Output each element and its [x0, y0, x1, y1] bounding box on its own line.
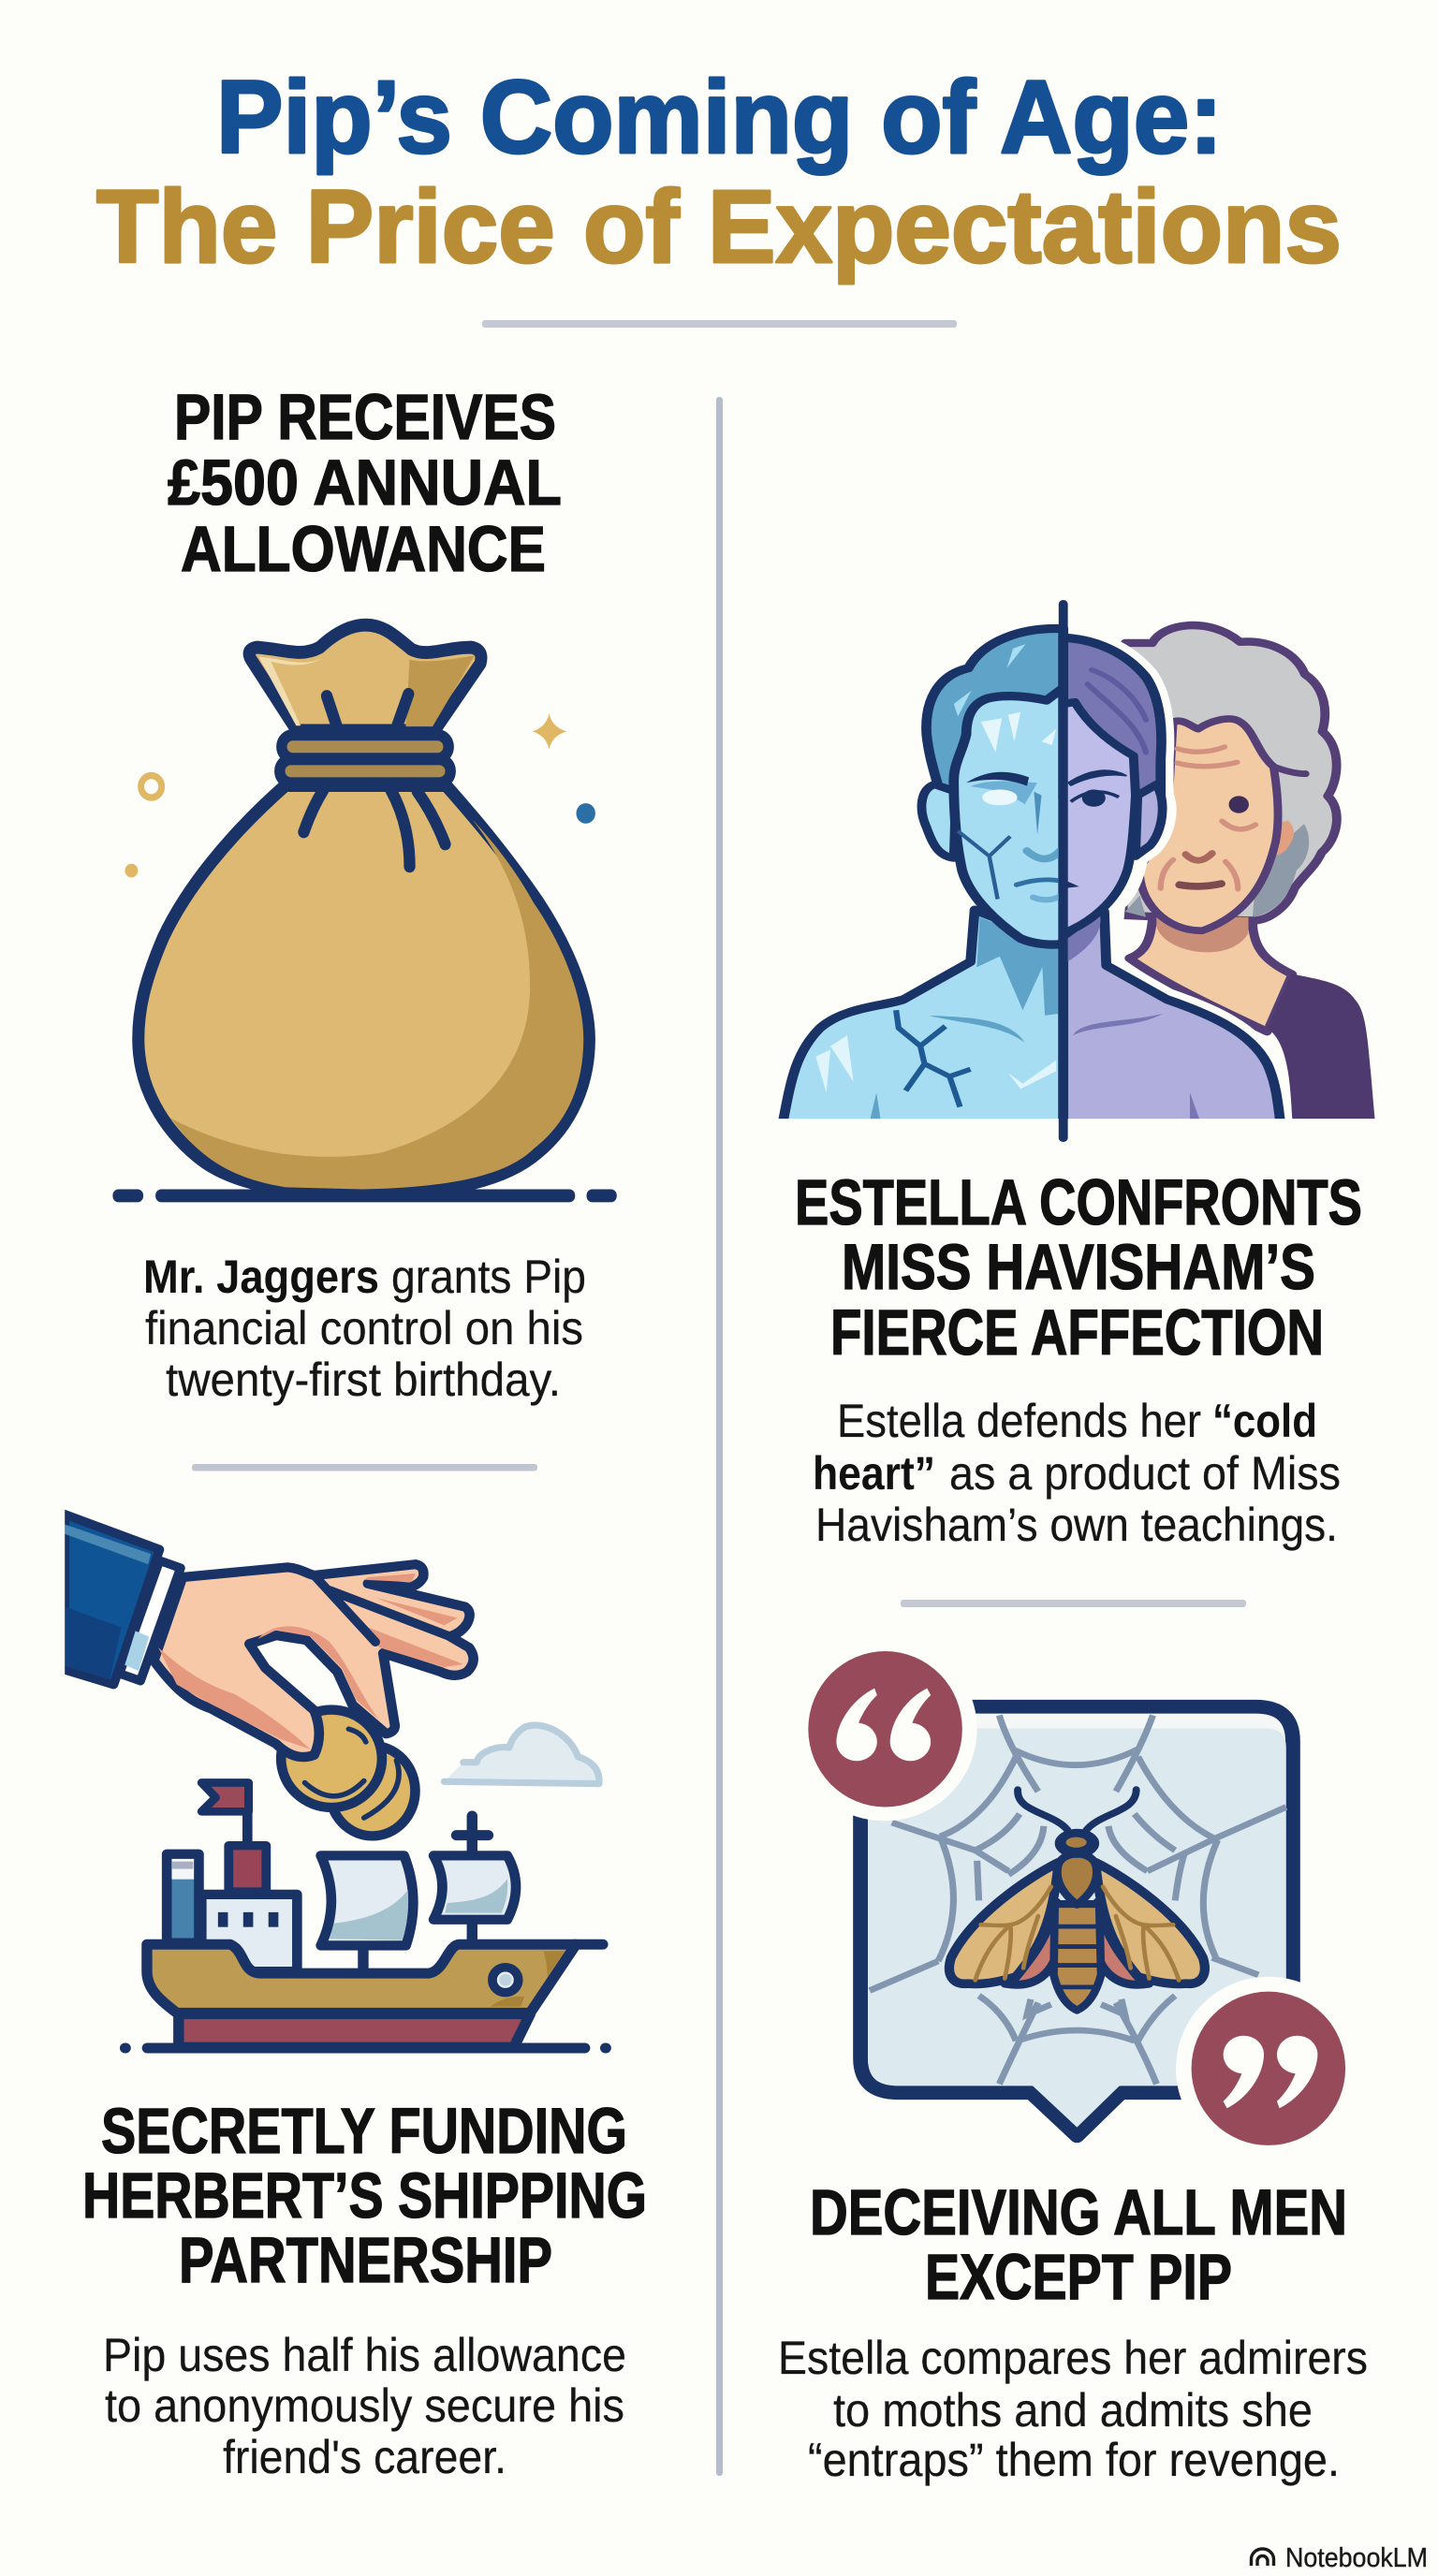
abdomen: [1053, 1904, 1101, 2011]
title: [96, 60, 1342, 285]
havisham hair: [1123, 625, 1337, 921]
sleeve: [54, 1505, 159, 1685]
waterline: [125, 2035, 606, 2061]
funnels: [167, 1846, 266, 1943]
heading: pip receives allowance: PIP RECEIVES: [174, 381, 556, 453]
text: jaggers grants control: Mr. Jaggers: [143, 1251, 379, 1303]
cloud: [444, 1725, 599, 1784]
text: jaggers grants control: grants Pip: [391, 1251, 586, 1303]
flag: [201, 1782, 249, 1844]
heading: pip receives allowance: £500 ANNUAL: [168, 446, 562, 519]
ice half: hair: [926, 628, 1064, 790]
text: jaggers grants control: [143, 1251, 586, 1406]
heading: secretly funding herbert: SECRETLY FUNDING: [101, 2095, 627, 2167]
heading: pip receives allowance: ALLOWANCE: [181, 513, 546, 585]
text: estella defends cold heart: heart”: [813, 1447, 935, 1500]
text: pip uses half allowance: Pip uses half his allowance: [103, 2329, 626, 2381]
title: The Price of Expectations: [96, 169, 1342, 285]
spider web: [870, 1715, 1286, 2084]
heading: deceiving all men: EXCEPT PIP: [925, 2241, 1232, 2313]
lavender half: body: [1064, 912, 1281, 1125]
head: [1055, 1829, 1099, 1858]
heading: secretly funding herbert: HERBERT’S SHIPPING: [82, 2159, 647, 2232]
heading: estella confronts: MISS HAVISHAM’S: [842, 1231, 1315, 1303]
bag neck: [249, 625, 481, 730]
text: jaggers grants control: financial control on his: [145, 1302, 583, 1354]
quote right: [1176, 1977, 1361, 2160]
hand: [154, 1564, 474, 1757]
text: pip uses half allowance: friend's career.: [223, 2431, 506, 2483]
right wings: [1093, 1863, 1205, 1984]
text: estella compares admirers: Estella compares her admirers: [778, 2332, 1368, 2384]
speech frame: [860, 1706, 1293, 2136]
text: estella defends cold heart: “cold: [1212, 1395, 1317, 1447]
havisham face: [1139, 719, 1306, 930]
ice half: body: [783, 910, 1064, 1125]
text: estella defends cold heart: Estella defends her: [837, 1395, 1201, 1447]
text: pip uses half allowance: to anonymously secure his: [105, 2379, 624, 2432]
cabin: [201, 1895, 297, 1971]
moth: [949, 1790, 1205, 2011]
coins: [281, 1710, 415, 1836]
quote left: [792, 1637, 977, 1821]
thorax: [1057, 1853, 1096, 1905]
heading: estella confronts: FIERCE AFFECTION: [830, 1296, 1324, 1368]
heading: secretly funding herbert: PARTNERSHIP: [179, 2224, 552, 2296]
hull: [147, 1944, 603, 2047]
text: estella defends cold heart: Havisham’s own teachings.: [815, 1499, 1338, 1551]
icon: money bag: [112, 625, 617, 1202]
icon: notebooklm arcs: [1251, 2549, 1273, 2566]
left wings: [949, 1863, 1061, 1984]
rope bands: [282, 735, 448, 758]
bag body: [139, 785, 589, 1195]
text: jaggers grants control: twenty-first birthday.: [166, 1354, 561, 1406]
ground line: [112, 1190, 143, 1202]
ties: [303, 694, 446, 867]
text: estella compares admirers: [778, 2332, 1368, 2486]
text: pip uses half allowance: [103, 2329, 626, 2483]
sails: [321, 1816, 516, 1973]
title: Pip’s Coming of Age:: [216, 60, 1223, 175]
white halo: [1118, 642, 1292, 1119]
havisham body: [1129, 917, 1375, 1121]
text: estella defends cold heart: as a product of Miss: [949, 1447, 1341, 1500]
icon: hand dropping coins over ship: [54, 1505, 606, 2048]
ice half: ear: [922, 784, 956, 858]
cuff: [120, 1560, 181, 1681]
text: estella compares admirers: “entraps” them for revenge.: [808, 2434, 1340, 2486]
lavender half: ear: [1136, 784, 1163, 856]
center divider line: [1059, 600, 1068, 1142]
heading: secretly funding herbert: [82, 2095, 647, 2296]
text: estella compares admirers: to moths and admits she: [833, 2384, 1313, 2437]
lavender half: hair: [1064, 637, 1161, 798]
icon: moth in spider web with quote marks: [792, 1637, 1361, 2160]
heading: deceiving all men: [810, 2176, 1347, 2313]
notebooklm logo and wordmark: NotebookLM: [1285, 2543, 1428, 2573]
antennae: [1018, 1790, 1137, 1830]
ice half: face: [954, 688, 1064, 944]
lavender half: face: [1064, 702, 1136, 933]
icon: split face of estella and miss havisham: [783, 600, 1375, 1142]
sparkles: [533, 713, 566, 749]
heading: pip receives allowance: [168, 381, 562, 585]
heading: estella confronts: [795, 1166, 1362, 1368]
text: estella defends cold heart: [813, 1395, 1341, 1551]
